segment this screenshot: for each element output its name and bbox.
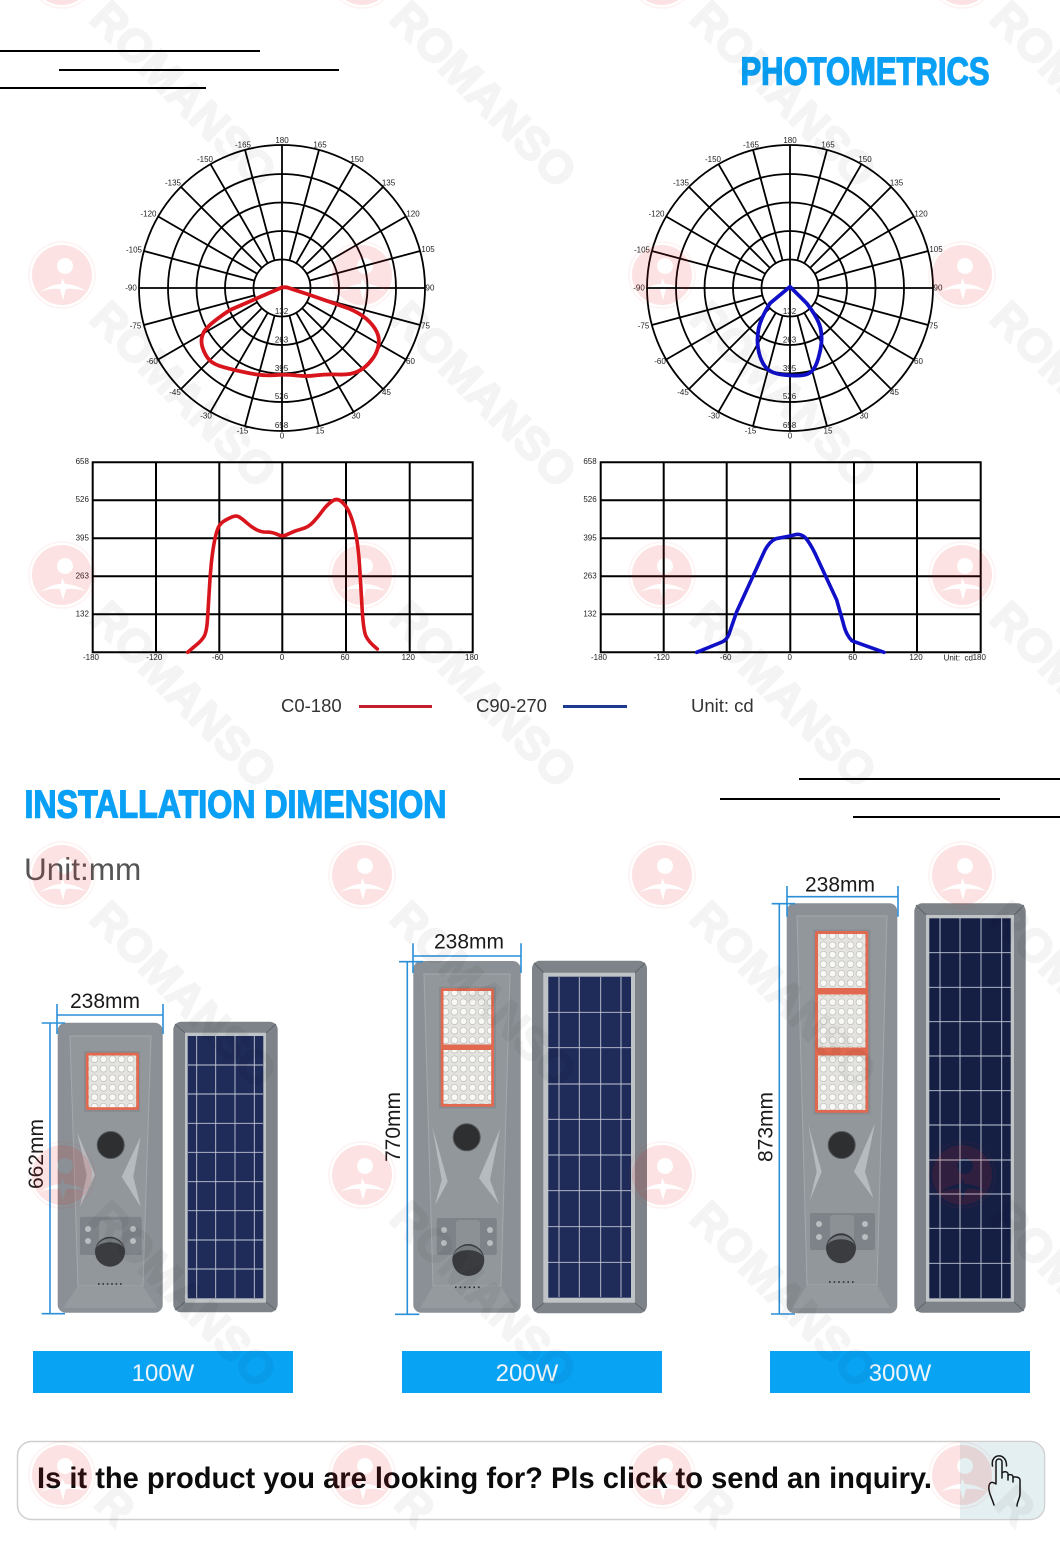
polar labels: -150 [197, 155, 214, 164]
red polar curve [201, 287, 379, 376]
lamp front 300W [787, 903, 897, 1313]
polar labels: 120 [406, 210, 420, 218]
dimension lines 200W [395, 943, 521, 1315]
polar grid [647, 145, 933, 431]
polar labels [125, 136, 435, 440]
watermark overlay: ROMANSO [380, 891, 587, 1098]
wattage bar 200W [402, 1351, 662, 1393]
polar labels: -135 [673, 178, 690, 188]
solar panel 100W [173, 1022, 278, 1312]
polar labels: -45 [677, 388, 689, 397]
heading: installation dimension: INSTALLATION DIMENSION [24, 784, 446, 826]
product: 100W [25, 990, 293, 1393]
polar labels: 45 [382, 388, 391, 397]
chart axis labels: 263 [583, 572, 597, 580]
polar labels: 45 [890, 388, 899, 397]
lamp front 100W [58, 1023, 163, 1313]
legend [281, 695, 754, 716]
polar labels: 15 [316, 426, 325, 436]
chart axis labels: -180 [83, 653, 100, 662]
polar labels: -30 [200, 412, 212, 420]
chart axis labels [583, 457, 987, 662]
watermark overlay: R [985, 1476, 1045, 1536]
legend label C90-270: C90-270 [476, 695, 547, 716]
polar labels: 180 [275, 136, 289, 145]
watermark overlay: ROMANSO [80, 291, 287, 498]
chart axis labels: 120 [402, 653, 416, 662]
chart axis labels: 526 [583, 495, 597, 504]
polar labels: -45 [169, 388, 181, 397]
unit note: Unit:mm [24, 851, 141, 887]
product: 200W [382, 930, 662, 1393]
polar labels: -105 [634, 246, 651, 254]
watermark overlay: ROMANSO [680, 891, 887, 1098]
chart grid [93, 462, 473, 652]
decorative header rules right [720, 779, 1060, 817]
polar labels: -90 [633, 284, 645, 292]
width label 300W: 238mm [805, 874, 875, 896]
polar labels: -165 [743, 140, 760, 150]
chart axis labels: 132 [583, 610, 597, 618]
polar labels: 30 [352, 412, 361, 420]
chart axis labels [76, 457, 479, 662]
polar chart: C90-270 [633, 136, 943, 440]
heading: photometrics: PHOTOMETRICS [740, 50, 990, 94]
polar labels: 150 [350, 155, 364, 164]
banner box [18, 1442, 1044, 1520]
polar labels: 135 [890, 178, 904, 188]
width label 100W: 238mm [70, 990, 140, 1013]
chart axis labels: 60 [341, 653, 350, 662]
inquiry text: Is it the product you are looking for? Pls click to send an inquiry. [37, 1462, 932, 1495]
red distribution curve [188, 500, 377, 652]
polar labels: 105 [929, 245, 943, 254]
polar labels: 165 [313, 140, 327, 150]
polar labels: -30 [708, 412, 720, 420]
chart axis labels: 395 [76, 534, 90, 542]
height label 200W: 770mm [382, 1092, 405, 1162]
blue distribution curve [697, 534, 884, 652]
polar chart: C0-180 [125, 136, 435, 440]
polar labels: 526 [275, 392, 289, 401]
chart axis labels: 263 [76, 572, 90, 580]
width label 200W: 238mm [434, 930, 504, 954]
watermark overlay: ROMANSO [680, 591, 887, 798]
polar labels: -165 [235, 140, 252, 150]
chart axis labels: 658 [76, 457, 90, 466]
polar labels: -60 [654, 357, 666, 366]
polar labels: 395 [783, 364, 797, 373]
polar labels: 75 [929, 322, 938, 330]
height label 100W: 662mm [25, 1119, 48, 1189]
watermark overlay: R [385, 1476, 445, 1536]
polar labels: 263 [275, 336, 289, 344]
polar labels: -90 [125, 284, 137, 292]
polar labels: -75 [638, 322, 650, 330]
polar labels: 150 [858, 155, 872, 164]
solar panel 300W [914, 903, 1026, 1313]
polar labels: 135 [382, 178, 396, 188]
legend blue line [563, 705, 627, 708]
chart axis labels: 60 [848, 653, 858, 662]
line chart: C0-180 [76, 457, 479, 662]
chart axis labels: 395 [583, 534, 597, 542]
chart axis labels: -180 [591, 653, 608, 662]
polar labels: 60 [914, 357, 923, 366]
polar labels: -75 [130, 322, 142, 330]
polar labels: 15 [824, 426, 833, 436]
legend unit: Unit: cd [691, 695, 754, 716]
chart axis labels: 132 [76, 610, 90, 618]
dimension lines 100W [42, 1004, 163, 1314]
polar labels [633, 136, 943, 440]
chart axis labels: 180 [465, 653, 479, 662]
chart axis labels: -120 [146, 653, 163, 662]
lamp front 200W [413, 961, 521, 1313]
polar labels: 526 [783, 392, 797, 401]
polar labels: -120 [140, 210, 157, 218]
watermark overlay: ROMANSO [80, 1191, 287, 1398]
polar labels: 658 [275, 421, 289, 430]
polar labels: -135 [165, 178, 182, 188]
watermark overlay: ROMANSO [80, 891, 287, 1098]
watermark overlay: R [85, 1476, 145, 1536]
polar labels: 263 [783, 336, 797, 344]
watermark overlay: ROMANSO [380, 291, 587, 498]
polar labels: 395 [275, 364, 289, 373]
polar labels: 90 [426, 284, 435, 292]
polar labels: 165 [821, 140, 835, 150]
watermark overlay: ROMANSO [380, 1191, 587, 1398]
wattage bar 100W [33, 1351, 293, 1393]
polar labels: 30 [860, 412, 869, 420]
chart axis labels: 180 [973, 653, 987, 662]
polar labels: 658 [783, 421, 797, 430]
polar labels: -120 [648, 210, 665, 218]
watermark overlay: ROMANSO [680, 1191, 887, 1398]
line chart: C90-270 [583, 457, 987, 662]
polar labels: -150 [705, 155, 722, 164]
wattage text 200W: 200W [496, 1360, 559, 1387]
watermark overlay: ROMANSO [80, 591, 287, 798]
chart axis labels: 0 [787, 653, 792, 662]
polar labels: 0 [280, 432, 285, 440]
polar labels: 120 [914, 210, 928, 218]
decorative header rules left [0, 51, 339, 88]
polar labels: 75 [421, 322, 430, 330]
watermark overlay: ROMANSO [380, 591, 587, 798]
polar grid [139, 145, 425, 431]
polar labels: -15 [745, 426, 757, 436]
inquiry banner [18, 1442, 1044, 1520]
watermark overlay: R [685, 1476, 745, 1536]
legend label C0-180: C0-180 [281, 695, 342, 716]
chart axis labels: -120 [654, 653, 670, 662]
wattage bar 300W [770, 1351, 1030, 1393]
icon: pointing hand [989, 1456, 1020, 1506]
dimension lines 300W [771, 886, 898, 1314]
polar labels: 105 [421, 245, 435, 254]
wattage text 100W: 100W [132, 1360, 195, 1387]
chart axis labels: Unit: cd [944, 654, 973, 662]
product: 300W [755, 874, 1030, 1393]
polar labels: 132 [783, 307, 797, 316]
legend red line [359, 705, 432, 708]
wattage text 300W: 300W [869, 1360, 932, 1387]
polar labels: 90 [934, 284, 943, 292]
polar labels: 60 [406, 357, 415, 366]
polar labels: -60 [146, 357, 158, 366]
chart axis labels: 658 [583, 457, 597, 466]
polar labels: 0 [788, 432, 793, 440]
polar labels: 132 [275, 307, 289, 316]
chart axis labels: 120 [909, 653, 923, 662]
chart axis labels: 526 [76, 495, 90, 504]
chart axis labels: -60 [212, 653, 224, 662]
icon panel [960, 1442, 1044, 1519]
chart axis labels: -60 [720, 653, 732, 662]
polar labels: 180 [783, 136, 797, 145]
height label 300W: 873mm [755, 1092, 778, 1162]
watermark overlay: ROMANSO [680, 291, 887, 498]
chart grid [601, 462, 981, 652]
chart axis labels: 0 [280, 653, 285, 662]
polar labels: -105 [126, 246, 143, 254]
polar labels: -15 [237, 426, 249, 436]
solar panel 200W [532, 961, 647, 1313]
blue polar curve [757, 287, 822, 376]
